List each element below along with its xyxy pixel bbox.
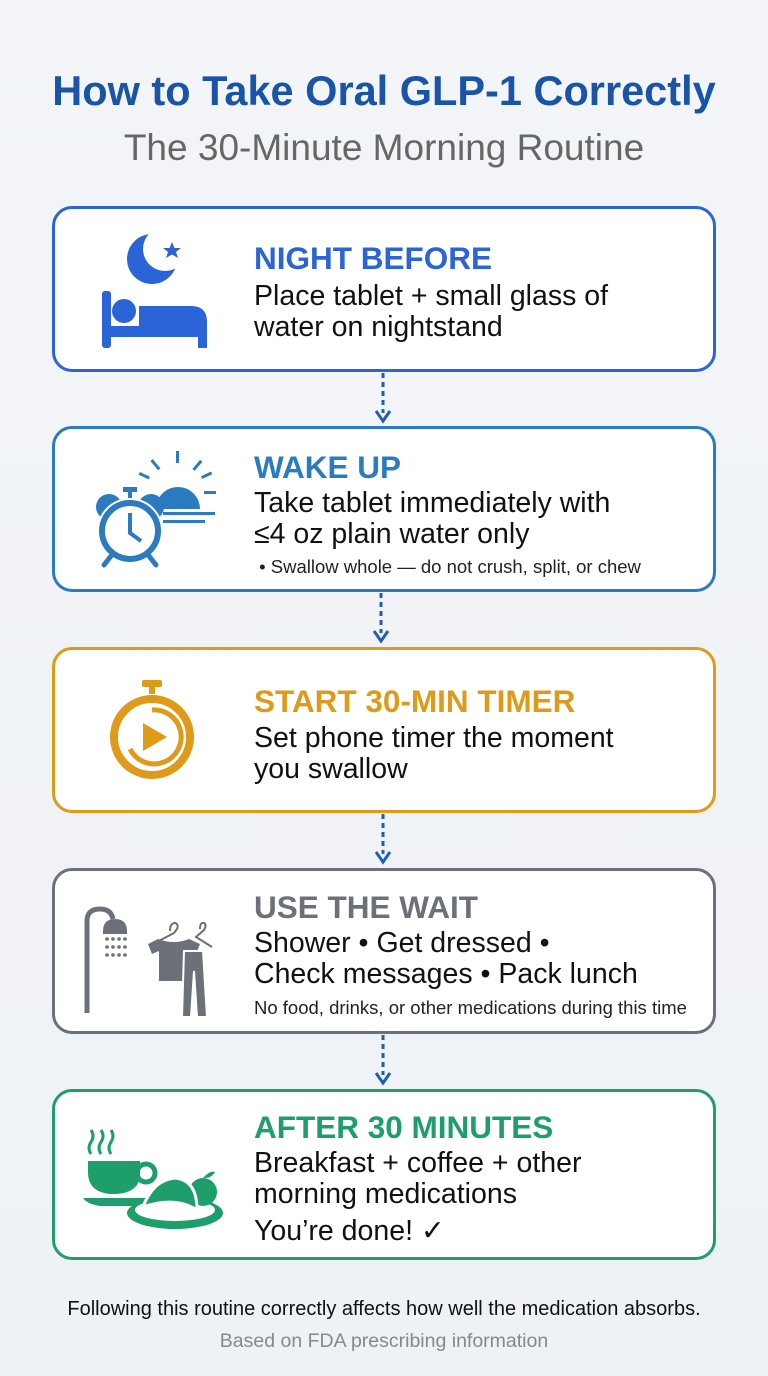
panel: after 30 minutes — [52, 1089, 716, 1260]
body text — [254, 487, 610, 550]
body text: morning medications — [254, 1178, 517, 1210]
icon: moon and bed — [102, 234, 207, 348]
arrow 3 — [374, 814, 392, 864]
heading: WAKE UP — [254, 449, 401, 485]
body text: ≤4 oz plain water only — [254, 518, 529, 550]
source: Based on FDA prescribing information — [220, 1330, 548, 1352]
body text: water on nightstand — [254, 311, 503, 343]
body text — [254, 280, 608, 343]
subtitle: The 30-Minute Morning Routine — [124, 127, 644, 168]
arrow 2 — [372, 593, 390, 644]
body text: you swallow — [254, 753, 408, 785]
done line: You’re done! ✓ — [254, 1215, 445, 1247]
heading: USE THE WAIT — [254, 889, 478, 925]
footer note: Following this routine correctly affects how well the medication absorbs. — [67, 1298, 701, 1320]
body text: Shower • Get dressed • — [254, 927, 550, 959]
panel: start timer — [52, 647, 716, 813]
heading: START 30-MIN TIMER — [254, 683, 575, 719]
arrow 1 — [374, 373, 392, 424]
note: • Swallow whole — do not crush, split, or chew — [259, 556, 641, 577]
icon: coffee and breakfast — [83, 1129, 223, 1229]
icon: stopwatch — [110, 680, 194, 779]
body text: Take tablet immediately with — [254, 487, 610, 519]
body text — [254, 1147, 581, 1210]
heading: AFTER 30 MINUTES — [254, 1109, 553, 1145]
arrow 4 — [374, 1035, 392, 1086]
body text: Check messages • Pack lunch — [254, 958, 638, 990]
body text — [254, 722, 614, 785]
body text — [254, 927, 638, 990]
panel: night before — [52, 206, 716, 372]
title: How to Take Oral GLP-1 Correctly — [52, 67, 716, 114]
icon: shower and clothes — [84, 906, 212, 1016]
body text: Breakfast + coffee + other — [254, 1147, 581, 1179]
body text: Place tablet + small glass of — [254, 280, 608, 312]
body text: Set phone timer the moment — [254, 722, 614, 754]
icon: alarm clock and sunrise — [96, 451, 216, 568]
panel: use the wait — [52, 868, 716, 1034]
note: No food, drinks, or other medications during this time — [254, 997, 687, 1018]
heading: NIGHT BEFORE — [254, 240, 492, 276]
panel: wake up — [52, 426, 716, 592]
